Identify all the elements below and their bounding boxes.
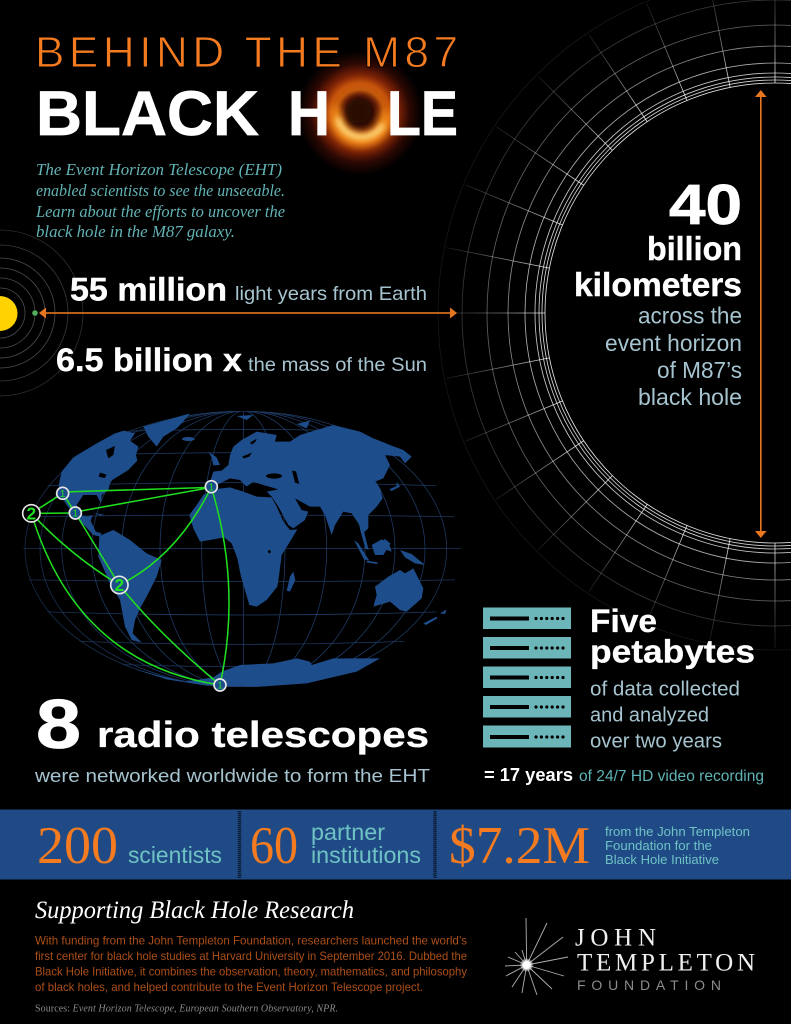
stat: 8 radio telescopes: radio telescopes [97, 714, 429, 755]
stat: 40 billion kilometers: of M87’s [657, 357, 742, 383]
stat: 60 partner institutions: 60 [250, 817, 298, 875]
panel: stats band [0, 810, 791, 880]
stat: 8 radio telescopes: were networked worldwide to form the EHT [34, 765, 430, 786]
stat: 40 billion kilometers: black hole [638, 384, 742, 410]
stat: 60 partner institutions: partner [311, 819, 385, 845]
stat: 40 billion kilometers: event horizon [605, 330, 742, 356]
text block: funding: With funding from the John Templeton Foundation, researchers launched the world’s [35, 934, 467, 948]
stat: 8 radio telescopes [34, 685, 430, 786]
event horizon grid [438, 0, 791, 650]
logo: john templeton foundation: JOHN [575, 924, 656, 952]
telescope site markers: 1 [209, 482, 215, 493]
stat: 7.2M funding: Black Hole Initiative [605, 852, 719, 867]
stat: 40 billion kilometers: kilometers [574, 266, 742, 303]
stat: 40 billion kilometers [574, 173, 742, 410]
telescope network links [31, 487, 229, 685]
telescope site markers: 1 [217, 681, 223, 692]
stat: 40 billion kilometers: billion [647, 230, 742, 267]
intro text: black hole in the M87 galaxy. [36, 222, 235, 241]
image: black hole glow [298, 51, 422, 175]
stat: 200 scientists: scientists [128, 842, 222, 868]
stat: 7.2M funding: from the John Templeton [605, 824, 750, 839]
stat: 7.2M funding: $7.2M [449, 817, 590, 875]
stat: five petabytes: petabytes [590, 634, 755, 670]
stat: 200 scientists: 200 [37, 817, 118, 875]
title: black hole: BLACK [36, 79, 259, 149]
stat: 55 million [70, 272, 427, 308]
title: black hole [36, 51, 458, 175]
stat: 55 million: light years from Earth [235, 283, 427, 305]
title: black hole: LE [387, 79, 458, 149]
telescope site markers: 1 [60, 489, 66, 500]
intro text: Learn about the efforts to uncover the [35, 202, 285, 221]
logo: john templeton foundation: TEMPLETON [577, 950, 755, 976]
stat: 8 radio telescopes: 8 [36, 685, 81, 763]
text block: funding: of black holes, and helped contribute to the Event Horizon Telescope project. [35, 981, 423, 994]
stat: 7.2M funding: Foundation for the [605, 838, 712, 853]
stat: 6.5 billion x: the mass of the Sun [248, 354, 427, 376]
icon: server stack [483, 608, 571, 748]
stat: 17 years of video: of 24/7 HD video recording [579, 768, 764, 785]
stat: five petabytes: over two years [590, 730, 722, 752]
title: behind the M87: BEHIND THE M87 [35, 28, 458, 77]
stat: five petabytes: and analyzed [590, 704, 709, 726]
text block: funding: Black Hole Initiative, it combines the observation, theory, mathematics, and philosophy [35, 966, 467, 978]
sources: Sources: Event Horizon Telescope, European Southern Observatory, NPR. [35, 1004, 338, 1014]
stat: 60 partner institutions: institutions [311, 842, 421, 868]
intro text: enabled scientists to see the unseeable. [36, 181, 285, 200]
intro text [35, 160, 285, 241]
telescope site markers: 2 [27, 503, 36, 523]
icon: starburst [505, 918, 568, 995]
text block: funding: first center for black hole studies at Harvard University in September 2016. Dubbed the [35, 950, 467, 963]
logo: john templeton foundation [505, 918, 755, 995]
icon: solar system [0, 230, 83, 396]
text block: funding [35, 934, 467, 994]
stat: 7.2M funding [449, 817, 750, 875]
title: black hole: H [288, 79, 330, 149]
inland seas [99, 439, 299, 553]
stat: five petabytes: of data collected [590, 678, 740, 700]
logo: john templeton foundation: FOUNDATION [577, 977, 721, 993]
stat: 40 billion kilometers: across the [638, 302, 742, 328]
title: black hole: O [334, 79, 383, 149]
stat: five petabytes: Five [590, 603, 657, 639]
stat: 60 partner institutions [250, 817, 421, 875]
world map [0, 411, 484, 692]
telescope site markers: 2 [115, 575, 124, 595]
telescope site markers: 1 [73, 509, 79, 520]
arrow: distance [39, 308, 457, 318]
stat: 200 scientists [37, 817, 222, 875]
stat: five petabytes [590, 603, 755, 752]
intro text: The Event Horizon Telescope (EHT) [36, 160, 282, 179]
stat: 55 million: 55 million [70, 272, 227, 308]
stat: 6.5 billion x: 6.5 billion x [56, 342, 242, 378]
continents [59, 413, 447, 687]
stat: 17 years of video: = 17 years [484, 764, 573, 785]
heading: supporting black hole research: Supporting Black Hole Research [35, 897, 354, 924]
stat: 6.5 billion x [56, 342, 427, 378]
stat: 17 years of video [484, 764, 764, 785]
telescope site markers [23, 481, 226, 692]
arrow: event horizon width [755, 90, 767, 538]
stat: 40 billion kilometers: 40 [669, 173, 742, 237]
